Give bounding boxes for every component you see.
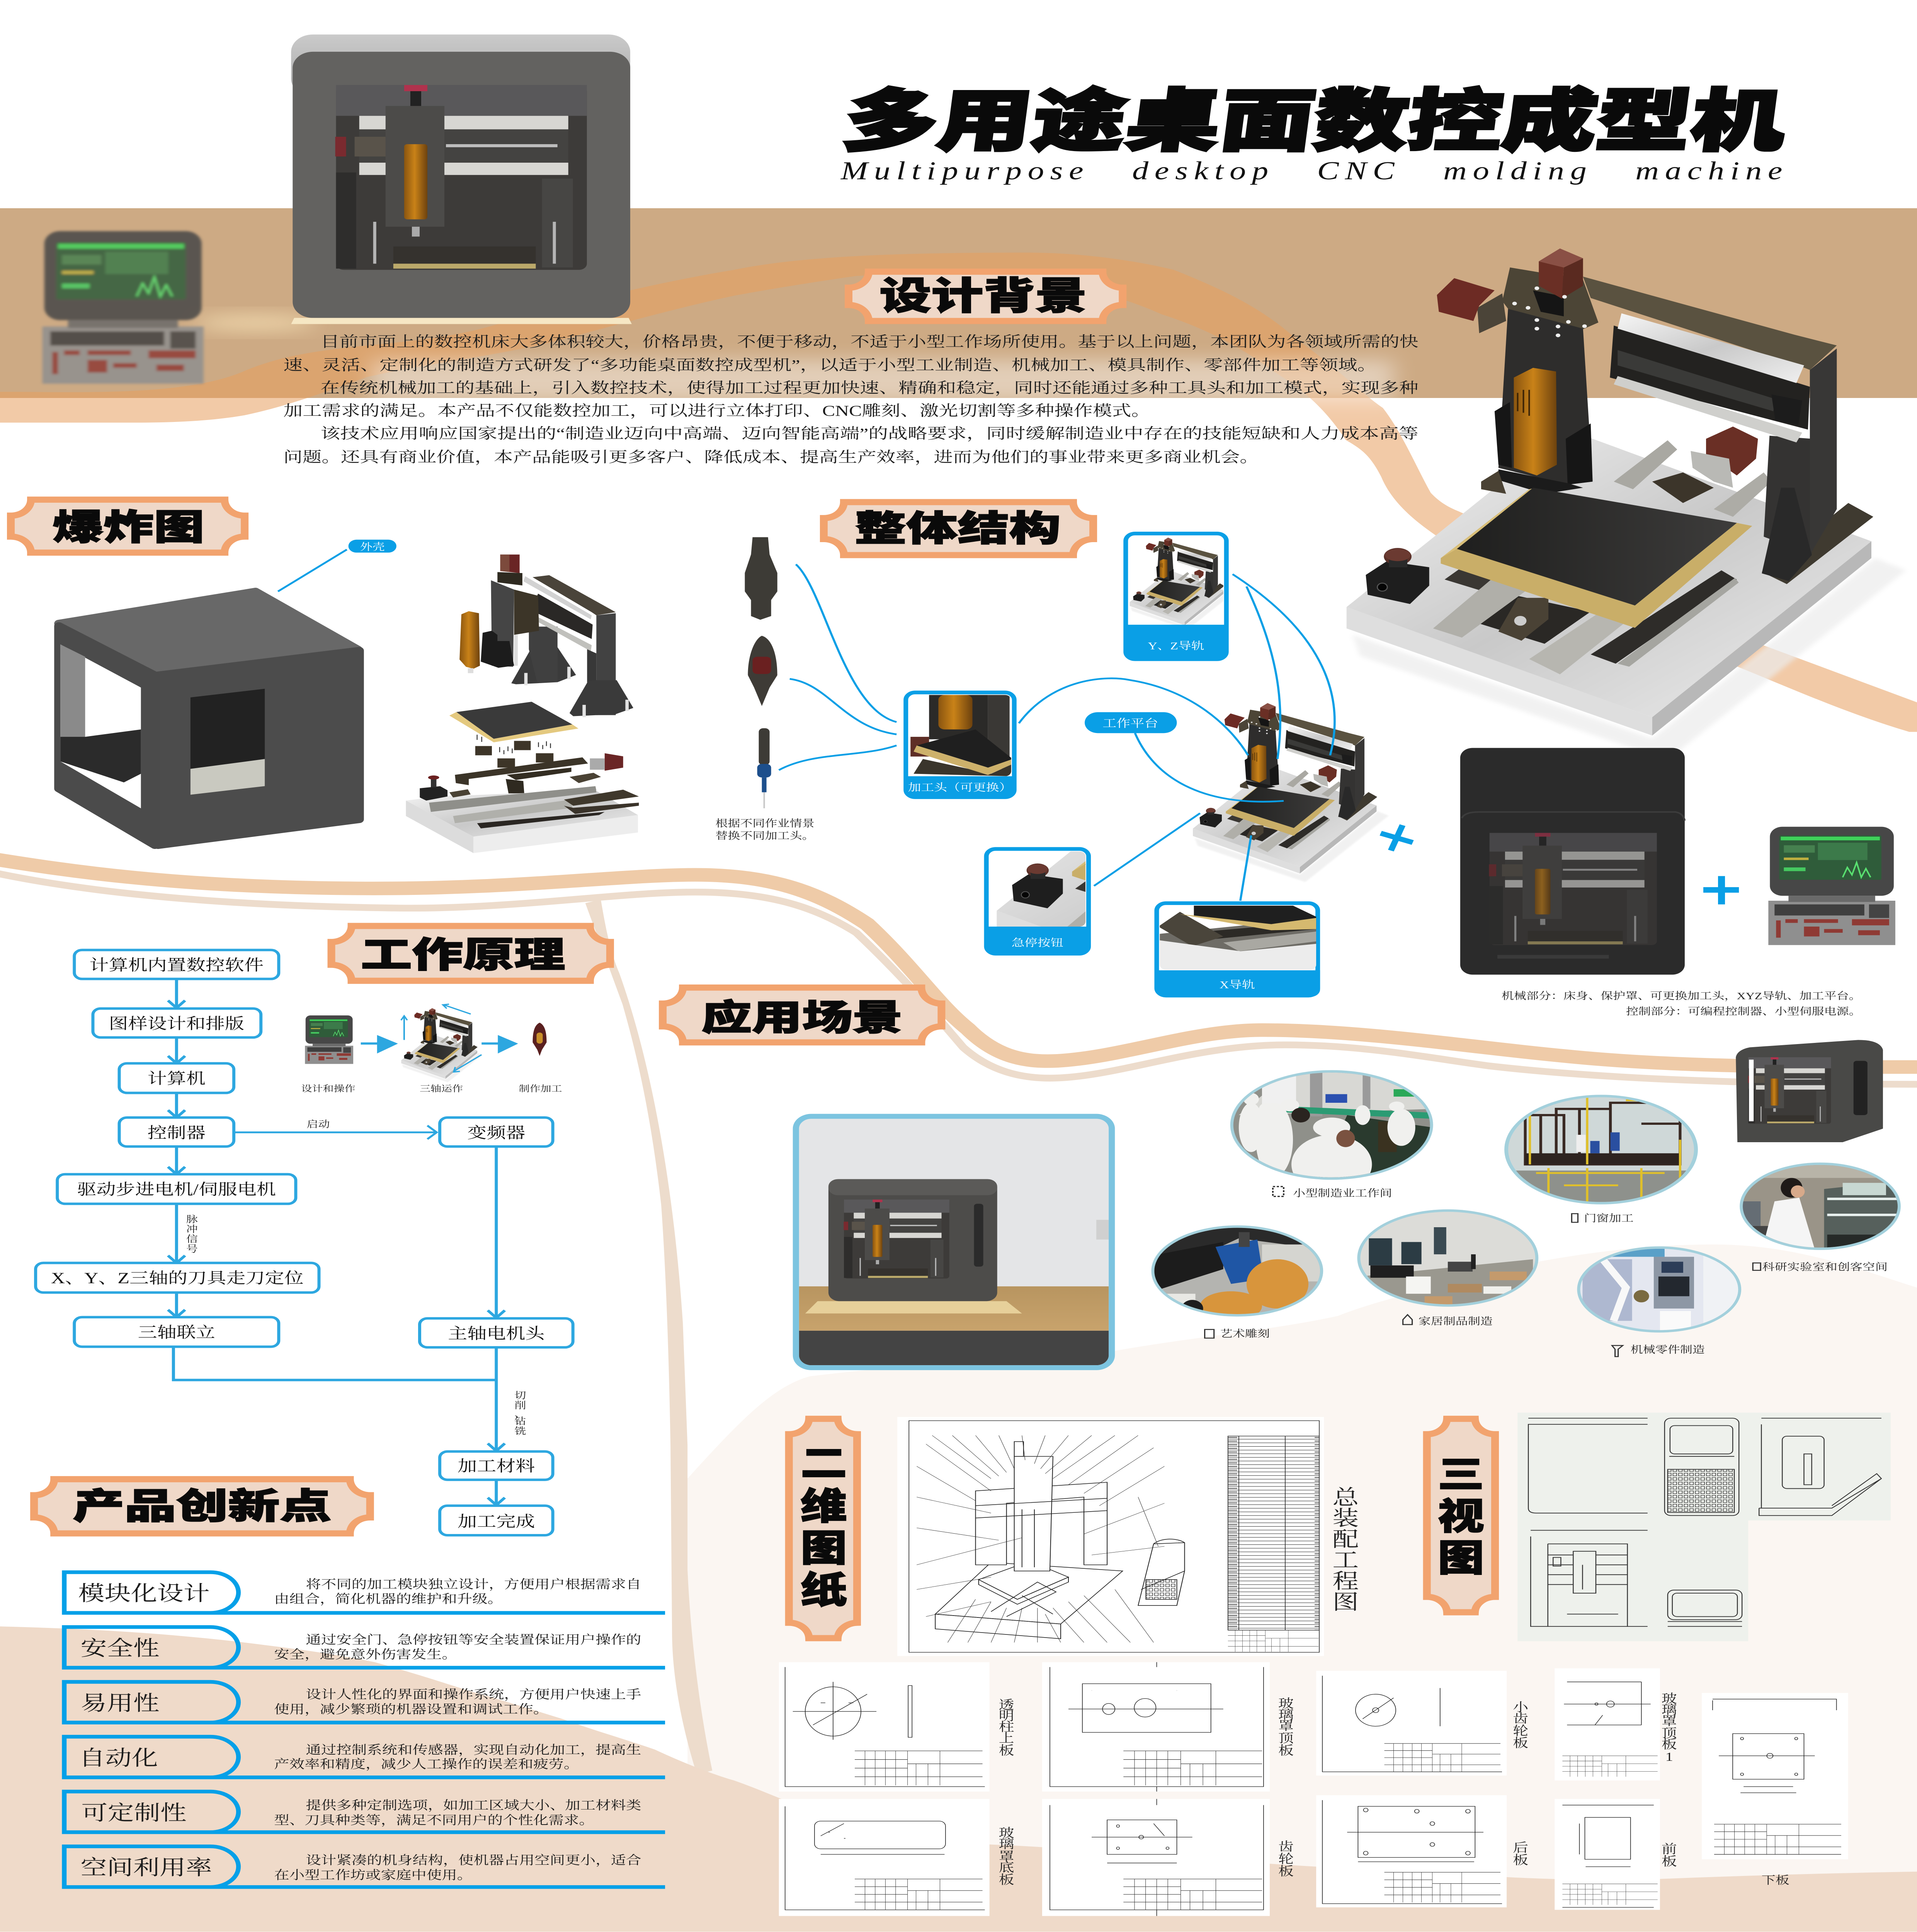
background: vertical strip [585, 900, 712, 1774]
label: 板 [1662, 1738, 1677, 1751]
label [1278, 1840, 1294, 1878]
text block: design background: 该技术应用响应国家提出的“制造业迈向中高端、迈向智能高端”的战略要求，同时缓解制造业中存在的技能短缺和人力成本高等 [321, 425, 1419, 442]
motion arrows [401, 1004, 481, 1072]
flow label vertical: 钻 [514, 1416, 526, 1427]
label: 后 [1513, 1841, 1528, 1855]
flow step [440, 1506, 553, 1535]
heading plate: three views: 三 [1438, 1454, 1484, 1495]
label: 前 [1662, 1842, 1677, 1856]
item: ease of use: 设计人性化的界面和操作系统，方便用户快速上手 [306, 1688, 641, 1701]
heading plate: three views: 图 [1438, 1538, 1484, 1579]
label: 柱 [999, 1720, 1014, 1734]
flow step [440, 1117, 553, 1146]
arrow [361, 1035, 398, 1053]
exploded enclosure shell [59, 592, 359, 845]
process labels: 设计和操作 [301, 1084, 356, 1094]
flow label vertical: 削 [514, 1400, 526, 1410]
label: 板 [999, 1873, 1014, 1887]
item: space utilization: 在小型工作坊或家庭中使用。 [274, 1868, 472, 1882]
photo: mechanical parts [1572, 1242, 1745, 1336]
heading plate: working principle: 工作原理 [361, 935, 565, 975]
item: customizable: 型、刀具种类等，满足不同用户的个性化需求。 [274, 1813, 594, 1827]
flow step: 变频器 [467, 1124, 525, 1141]
label: 板 [1513, 1853, 1528, 1867]
label: 1 [1665, 1750, 1673, 1764]
flow step [420, 1318, 573, 1347]
flow step: 计算机 [148, 1070, 206, 1087]
flow step [119, 1117, 234, 1146]
process labels: 制作加工 [519, 1084, 562, 1094]
hero enclosure machine [194, 34, 632, 330]
item: customizable: 提供多种定制选项，如加工区域大小、加工材料类 [306, 1799, 641, 1812]
label: 明 [999, 1709, 1014, 1723]
caption: mechanical parts: 机械零件制造 [1631, 1344, 1705, 1355]
caption: research lab: 科研实验室和创客空间 [1762, 1262, 1888, 1273]
drawing: general assembly [897, 1417, 1324, 1656]
label: general assembly: 配 [1332, 1528, 1359, 1551]
flow step: X、Y、Z三轴的刀具走刀定位 [51, 1270, 304, 1287]
item: safety: 通过安全门、急停按钮等安全装置保证用户操作的 [306, 1633, 641, 1646]
background: orange wave across header [0, 253, 1917, 732]
small 3/4 enclosure machine [1736, 1040, 1883, 1142]
caption: tool heads [715, 818, 815, 842]
label: 璃 [999, 1837, 1014, 1851]
label: 轮 [1513, 1724, 1528, 1738]
photo: doors and windows [1502, 1090, 1703, 1208]
caption: machine parts: 机械部分：床身、保护罩、可更换加工头，XYZ导轨、加工平台。 [1502, 991, 1861, 1002]
detail card: Y Z rails: Y、Z导轨 [1148, 640, 1204, 652]
label: 顶 [1278, 1731, 1294, 1745]
flow label vertical: 信 [186, 1234, 198, 1244]
label: 玻 [999, 1826, 1014, 1840]
process: controller [305, 1015, 353, 1064]
heading plate: 2D drawings: 图 [801, 1528, 847, 1569]
heading plate: application scenarios: 应用场景 [701, 998, 903, 1038]
heading plate: 2D drawings: 纸 [801, 1570, 847, 1611]
label: 上 [999, 1731, 1014, 1745]
process labels: 三轴运作 [420, 1084, 463, 1094]
plus icon [1703, 876, 1739, 905]
item: ease of use: 使用，减少繁琐的机器设置和调试工作。 [274, 1702, 549, 1716]
detail card: X rail [1155, 903, 1320, 997]
tool head 3 [757, 728, 771, 808]
detail card: machining head: 加工头（可更换） [908, 782, 1012, 793]
label: 板 [999, 1744, 1014, 1757]
flow label vertical: 冲 [186, 1224, 198, 1234]
view: front [1528, 1418, 1648, 1513]
flow step [36, 1263, 319, 1293]
text block: design background: 在传统机械加工的基础上，引入数控技术，使得加工过程更加快速、精确和稳定，同时还能通过多种工具头和加工模式，实现多种 [321, 380, 1419, 396]
label: general assembly: 图 [1332, 1591, 1359, 1614]
heading plate: 2D drawings: 维 [801, 1486, 847, 1527]
label [999, 1698, 1014, 1757]
item: ease of use: 易用性 [80, 1692, 160, 1715]
flow step [74, 950, 279, 979]
detail card: emergency stop [985, 624, 1444, 1033]
assembly: parts list table [1228, 1436, 1319, 1630]
label: 罩 [999, 1850, 1014, 1863]
item: safety: 安全，避免意外伤害发生。 [274, 1648, 457, 1661]
flow label vertical: 脉 [186, 1214, 198, 1225]
item: space utilization: 设计紧凑的机身结构，使机器占用空间更小，适合 [306, 1853, 641, 1867]
item: modular design: 将不同的加工模块独立设计，方便用户根据需求自 [306, 1577, 641, 1591]
text block: design background: 加工需求的满足。本产品不仅能数控加工，可以进行立体打印、CNC雕刻、激光切割等多种操作模式。 [283, 403, 1150, 419]
item: space utilization: 空间利用率 [80, 1856, 212, 1879]
item: automation: 通过控制系统和传感器，实现自动化加工，提高生 [306, 1743, 641, 1757]
flow step: 控制器 [148, 1124, 206, 1141]
detail card: emergency stop: 急停按钮 [1012, 937, 1063, 949]
sheet: small gear plate [1316, 1671, 1507, 1776]
detail card: Y Z rails [1124, 534, 1230, 660]
label: general assembly [1332, 1486, 1359, 1614]
callout: work platform [1085, 712, 1177, 733]
connector lines [779, 564, 1335, 901]
process labels [301, 1084, 562, 1094]
shell left window [60, 645, 141, 808]
callout: work platform: 工作平台 [1102, 717, 1158, 730]
item: space utilization [64, 1846, 665, 1887]
tool head 1 [745, 537, 777, 620]
scene card: machine on table [796, 1116, 1112, 1368]
label: 罩 [1278, 1719, 1294, 1733]
title [839, 84, 1790, 185]
label: 齿 [1278, 1840, 1294, 1854]
flow label vertical: 号 [186, 1244, 198, 1254]
callout: shell [278, 540, 396, 592]
innovation list [64, 1572, 665, 1887]
caption: machine parts: 控制部分：可编程控制器、小型伺服电源。 [1626, 1006, 1861, 1017]
background: wavy strip one [0, 859, 1917, 1067]
item: customizable [64, 1791, 665, 1832]
flow step [57, 1174, 296, 1204]
flow label: 启动 [306, 1119, 330, 1129]
text block: design background: 问题。还具有商业价值，本产品能吸引更多客户、降低成本、提高生产效率，进而为他们的事业带来更多商业机会。 [283, 449, 1259, 466]
sheet: glass cover top plate 1 [1555, 1668, 1660, 1781]
label: 璃 [1278, 1708, 1294, 1721]
caption: tool heads: 替换不同加工头。 [715, 831, 815, 842]
caption: tool heads: 根据不同作业情景 [715, 818, 815, 829]
flow connectors [168, 978, 505, 1505]
caption: small workshop: 小型制造业工作间 [1293, 1188, 1392, 1199]
photo: home goods [1355, 1208, 1541, 1308]
flow label vertical: 、 [514, 1409, 526, 1419]
label: 下板 [1762, 1874, 1789, 1887]
label: general assembly: 工 [1332, 1549, 1359, 1572]
process: machining bit [533, 1023, 547, 1056]
label [1662, 1692, 1677, 1764]
flowchart [36, 950, 573, 1535]
heading plate: design background: 设计背景 [879, 275, 1087, 318]
flow step [74, 1317, 279, 1347]
flow step: 加工完成 [458, 1513, 535, 1530]
label: 小 [1513, 1701, 1529, 1714]
soft light wash behind background text [372, 360, 1394, 402]
shell right window [191, 689, 265, 795]
centre CNC machine [1193, 703, 1389, 882]
view: side [1759, 1418, 1881, 1515]
heading plate: working principle [332, 926, 610, 981]
hero control laptop, blurred [43, 231, 204, 384]
process: machine [401, 1008, 482, 1082]
background: wavy strip two [0, 872, 1917, 1084]
label: 板 [1662, 1855, 1677, 1868]
label [1513, 1701, 1529, 1750]
heading plate: 2D drawings: 二 [801, 1443, 847, 1484]
label: 璃 [1662, 1703, 1677, 1717]
item: automation [64, 1737, 665, 1777]
caption: art carving: 艺术雕刻 [1220, 1328, 1270, 1339]
sheet: rear plate [1316, 1795, 1507, 1907]
flow step: 三轴联立 [138, 1324, 215, 1341]
item: automation: 产效率和精度，减少人工操作的误差和疲劳。 [274, 1757, 579, 1771]
big CNC machine render [1347, 248, 1906, 760]
label: general assembly: 总 [1332, 1486, 1359, 1509]
callout: shell: 外壳 [360, 542, 385, 553]
arrow [481, 1035, 518, 1053]
item: modular design [64, 1572, 665, 1613]
caption: home goods: 家居制品制造 [1419, 1316, 1493, 1327]
flow label vertical [514, 1390, 526, 1436]
photo: research lab [1734, 1158, 1905, 1254]
label: 罩 [1662, 1714, 1677, 1728]
heading plate: overall structure: 整体结构 [855, 509, 1061, 549]
label: 板 [1278, 1744, 1294, 1757]
label: 玻 [1662, 1692, 1677, 1706]
label: 顶 [1662, 1726, 1677, 1740]
label: 底 [999, 1861, 1014, 1874]
flow step: 图样设计和排版 [109, 1015, 244, 1032]
heading plate: product innovations: 产品创新点 [73, 1486, 332, 1526]
label: 透 [999, 1698, 1014, 1712]
flow step [440, 1451, 553, 1480]
sheet: glass cover top plate [1042, 1662, 1270, 1791]
sheet: glass cover bottom plate [779, 1799, 990, 1916]
background: bottom beige region [0, 1626, 1917, 1932]
label [1513, 1841, 1528, 1867]
detail card: machining head [904, 692, 1016, 798]
view: controller plan [1665, 1418, 1739, 1515]
control laptop [1768, 827, 1895, 945]
heading plate: application scenarios [663, 988, 941, 1043]
flow step: 加工材料 [458, 1458, 535, 1475]
plus icon [1375, 820, 1419, 855]
assembly: isometric line drawing [935, 1442, 1185, 1639]
sheet: gear plate [1042, 1799, 1270, 1916]
sheet: front plate [1555, 1799, 1660, 1910]
label: 玻 [1278, 1697, 1294, 1711]
item: customizable: 可定制性 [81, 1801, 187, 1825]
flow step [119, 1063, 234, 1093]
item: safety: 安全性 [80, 1637, 160, 1660]
label: general assembly: 装 [1332, 1507, 1359, 1530]
item: modular design: 由组合，简化机器的维护和升级。 [274, 1592, 503, 1606]
label [1662, 1842, 1677, 1868]
exploded machine parts [406, 554, 639, 853]
heading plate: three views [1427, 1419, 1495, 1612]
flow label vertical [186, 1214, 198, 1254]
item: ease of use [64, 1682, 665, 1723]
assembly: leader lines [917, 1435, 1164, 1643]
subtitle: Multipurpose desktop CNC molding machine [840, 156, 1782, 185]
background: lower-right pale region [687, 1245, 1917, 1932]
label: 轮 [1278, 1852, 1294, 1866]
caption: machine parts [1502, 991, 1861, 1017]
photo: art carving [1146, 1220, 1332, 1325]
sheet: transparent column upper plate [779, 1662, 990, 1791]
view: top machine [1531, 1530, 1648, 1626]
label: general assembly: 程 [1332, 1570, 1359, 1593]
flow step: 计算机内置数控软件 [89, 957, 264, 974]
title: 多用途桌面数控成型机 [839, 84, 1790, 159]
dark enclosure machine [1460, 748, 1685, 975]
heading plate: exploded view [11, 500, 245, 553]
heading plate: three views: 视 [1438, 1496, 1484, 1537]
flow step: 主轴电机头 [448, 1325, 545, 1342]
item: safety [64, 1627, 665, 1668]
flow step [93, 1009, 261, 1037]
tool head 2 [748, 636, 777, 706]
text block: design background: 速、灵活、定制化的制造方式研发了“多功能桌面数控成型机”，以适于小型工业制造、机械加工、模具制作、零部件加工等领域。 [283, 357, 1376, 374]
label: 板 [1278, 1864, 1294, 1878]
text block: design background: 目前市面上的数控机床大多体积较大，价格昂贵，不便于移动，不适于小型工作场所使用。基于以上问题，本团队为各领域所需的快 [321, 333, 1419, 350]
caption: doors and windows: 门窗加工 [1584, 1213, 1634, 1224]
label: 板 [1513, 1736, 1528, 1750]
heading plate: overall structure [824, 502, 1093, 555]
label [1278, 1697, 1294, 1757]
flow label vertical: 切 [514, 1390, 526, 1401]
text block: design background [283, 333, 1419, 466]
process diagram [301, 1004, 562, 1094]
photo: small workshop [1223, 1066, 1440, 1194]
flow step: 驱动步进电机/伺服电机 [77, 1181, 276, 1198]
item: automation: 自动化 [79, 1747, 158, 1770]
heading plate: design background [849, 272, 1123, 321]
background: tan band [0, 208, 1917, 398]
detail card: X rail: X导轨 [1220, 979, 1255, 991]
item: modular design: 模块化设计 [78, 1582, 210, 1605]
heading plate: 2D drawings [789, 1419, 857, 1638]
drawing: three views [1517, 1413, 1891, 1641]
label: 齿 [1513, 1712, 1528, 1725]
heading plate: exploded view: 爆炸图 [53, 508, 204, 548]
sheet: lower plate [1702, 1693, 1848, 1859]
flow label vertical: 铣 [514, 1426, 526, 1436]
heading plate: product innovations [34, 1479, 370, 1533]
view: small [1668, 1590, 1742, 1626]
label [999, 1826, 1014, 1887]
